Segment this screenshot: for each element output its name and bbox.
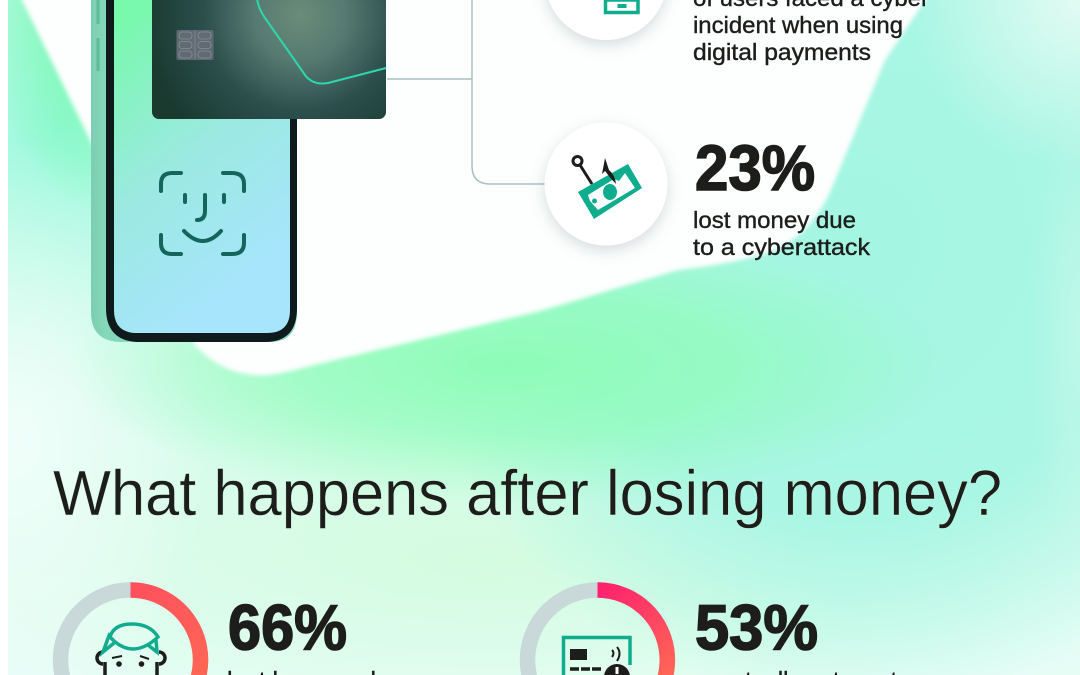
icon: money on a hook bbox=[573, 156, 642, 219]
phone body bbox=[91, 0, 297, 342]
description: incident when using bbox=[693, 12, 903, 38]
phone side buttons bbox=[96, 0, 100, 71]
stat: 53% bbox=[528, 590, 898, 675]
credit card bbox=[152, 0, 386, 119]
phone screen bbox=[114, 0, 290, 333]
icon: terminal box bbox=[606, 0, 638, 12]
donut chart 53% bbox=[528, 590, 668, 675]
donut chart 66% bbox=[60, 590, 201, 675]
stat: 66% bbox=[60, 590, 376, 675]
card chip bbox=[176, 30, 214, 60]
value: 66% bbox=[228, 592, 347, 664]
heading: What happens after losing money? bbox=[53, 457, 1002, 529]
stat: cyber incident bbox=[545, 0, 929, 65]
illustration: phone with card bbox=[91, 0, 386, 342]
value: 53% bbox=[695, 592, 818, 664]
description bbox=[693, 207, 871, 260]
card accent line bbox=[257, 0, 386, 84]
description: digital payments bbox=[693, 39, 871, 65]
white background shape bbox=[17, 0, 932, 375]
description bbox=[693, 0, 929, 65]
icon circle bbox=[544, 122, 668, 246]
stat: 23% lost money bbox=[544, 122, 871, 260]
description: to a cyberattack bbox=[693, 234, 871, 260]
connector lines bbox=[387, 0, 546, 184]
icon: worried face bbox=[97, 624, 165, 675]
icon: card reader alert bbox=[564, 638, 630, 675]
face id icon bbox=[161, 173, 244, 254]
value: 23% bbox=[695, 132, 815, 204]
description: lost money due bbox=[693, 207, 856, 233]
phone frame bbox=[106, 0, 297, 342]
icon circle bbox=[545, 0, 667, 40]
